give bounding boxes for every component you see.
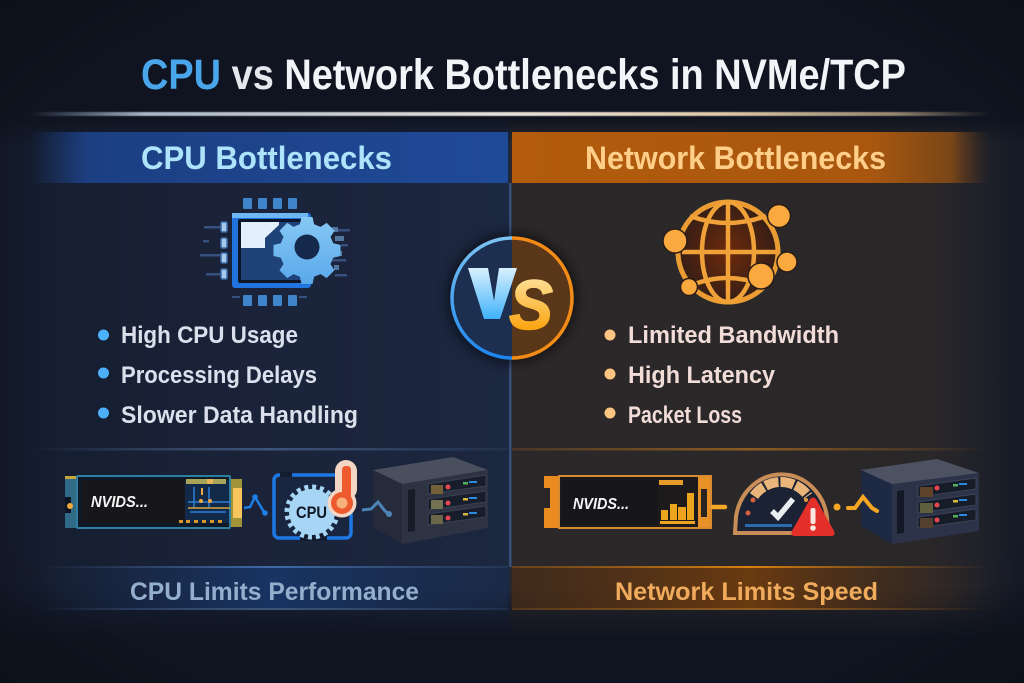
header: Network Bottlenecks (512, 132, 990, 183)
list: CPU bottleneck symptoms (98, 322, 358, 429)
list: network bottleneck symptoms: High Latency (628, 362, 776, 389)
icon: storage server, CPU side (373, 457, 488, 544)
band: CPU Limits Performance: CPU Limits Performance (130, 578, 419, 606)
icon: globe with nodes (663, 202, 797, 302)
header: CPU Bottlenecks: CPU Bottlenecks (141, 140, 392, 176)
list: network bottleneck symptoms (604, 322, 839, 429)
header: CPU Bottlenecks (30, 132, 508, 183)
icon: storage server, network side (861, 459, 979, 544)
icon: NVMe drive, CPU side (65, 476, 242, 528)
arrow: drive to gauge (713, 505, 725, 509)
icon: CPU with thermometer: CPU (296, 503, 327, 522)
panel: network bottlenecks background (510, 126, 1022, 621)
band: CPU Limits Performance (40, 566, 508, 610)
icon: NVMe drive, network side: NVIDS... (573, 496, 629, 513)
icon: NVMe drive, network side (544, 476, 711, 528)
VS badge (446, 232, 578, 364)
list: CPU bottleneck symptoms: High CPU Usage (121, 322, 298, 349)
list: network bottleneck symptoms: Limited Bandwidth (628, 322, 839, 349)
title: CPU vs Network Bottlenecks in NVMe/TCP (141, 51, 906, 99)
panel: CPU bottlenecks background (6, 125, 510, 623)
VS badge: S (509, 266, 553, 344)
list: network bottleneck symptoms: Packet Loss (628, 402, 742, 429)
title divider (30, 112, 990, 116)
arrow: gauge to storage (834, 497, 877, 511)
band: Network Limits Speed: Network Limits Speed (615, 578, 878, 606)
separators: lower section (30, 448, 990, 450)
icon: speed gauge with warning (735, 474, 835, 536)
center divider line (509, 183, 512, 567)
icon: CPU chip with gear (200, 198, 350, 306)
icon: CPU with thermometer (274, 460, 357, 541)
list: CPU bottleneck symptoms: Processing Delays (121, 362, 317, 389)
arrow: CPU to storage (362, 502, 392, 517)
header: Network Bottlenecks: Network Bottlenecks (585, 140, 886, 176)
band: Network Limits Speed (512, 566, 990, 610)
arrow: drive to CPU (244, 494, 268, 516)
list: CPU bottleneck symptoms: Slower Data Handling (121, 402, 358, 429)
icon: NVMe drive, CPU side: NVIDS... (91, 494, 148, 511)
